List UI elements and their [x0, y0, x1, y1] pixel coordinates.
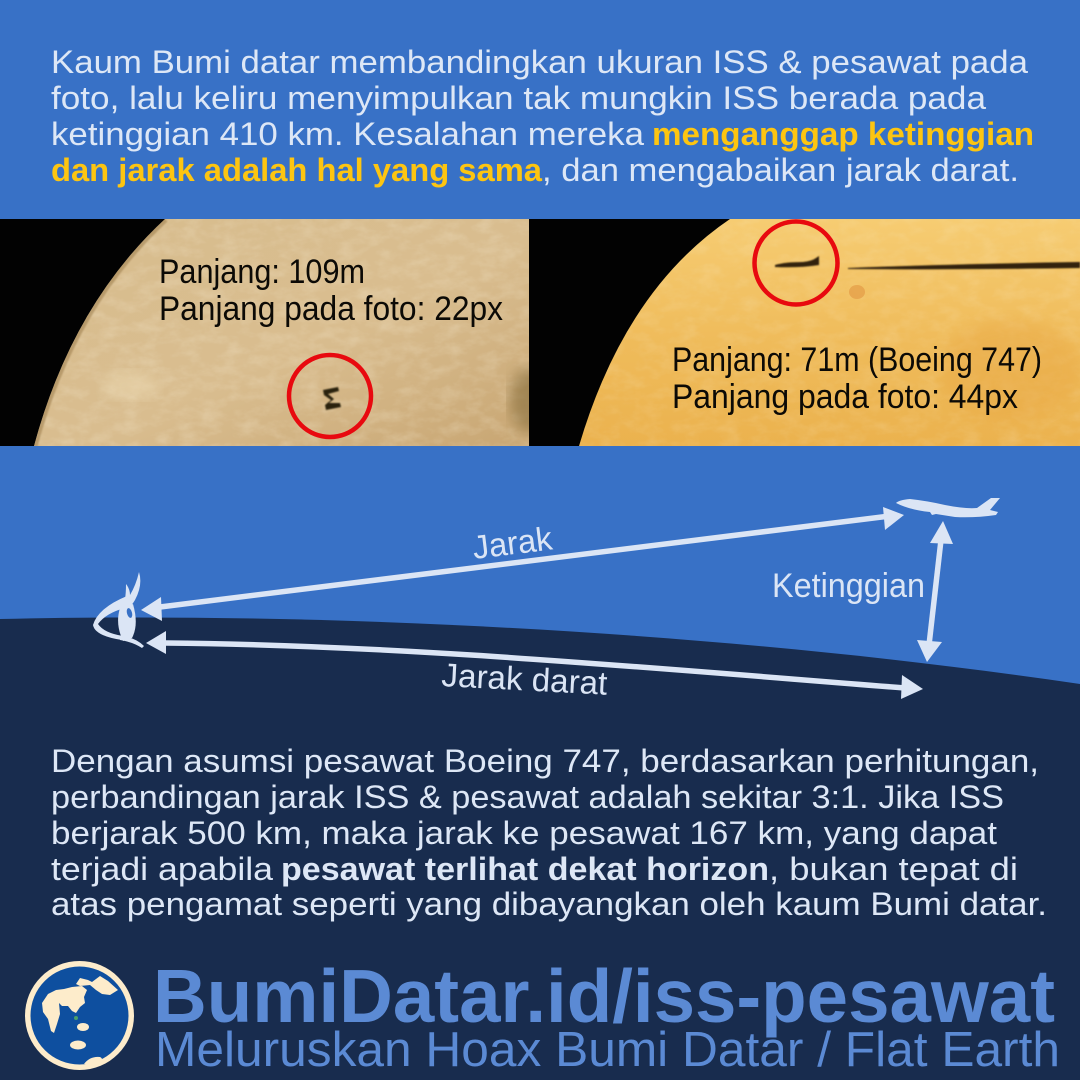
intro text block: ketinggian 410 km. Kesalahan mereka	[51, 116, 645, 152]
airplane silhouette and contrail	[775, 256, 1080, 269]
iss silhouette	[323, 387, 341, 410]
label: ketinggian: Ketinggian	[772, 567, 925, 605]
arrow: ketinggian	[917, 521, 953, 662]
intro text block: dan jarak adalah hal yang sama	[51, 152, 543, 188]
red circle: iss	[289, 355, 371, 437]
explanation text block	[51, 743, 1047, 922]
explanation text block: Dengan asumsi pesawat Boeing 747, berdasarkan perhitungan,	[51, 743, 1039, 779]
explanation text block: , bukan tepat di	[769, 851, 1018, 887]
iss label: Panjang: 109m	[159, 253, 365, 291]
site url: BumiDatar.id/iss-pesawat	[153, 954, 1055, 1038]
label: jarak: Jarak	[470, 519, 555, 566]
explanation text block: pesawat terlihat dekat horizon	[281, 851, 769, 887]
red circle: airplane	[754, 222, 838, 304]
airplane label: Panjang pada foto: 44px	[672, 378, 1018, 416]
explanation text block: atas pengamat seperti yang dibayangkan oleh kaum Bumi datar.	[51, 886, 1047, 922]
label: jarak darat: Jarak darat	[441, 656, 608, 702]
logo: globe	[25, 961, 134, 1070]
arrow: jarak	[141, 507, 904, 621]
photo: airplane crossing the moon	[529, 219, 1080, 446]
iss label: Panjang pada foto: 22px	[159, 290, 503, 328]
iss label	[159, 253, 503, 328]
arrow: jarak darat	[146, 631, 923, 699]
intro text block: menganggap ketinggian	[652, 116, 1034, 152]
intro text block: foto, lalu keliru menyimpulkan tak mungkin ISS berada pada	[51, 80, 987, 116]
airplane label	[672, 341, 1042, 416]
intro text block: , dan mengabaikan jarak darat.	[542, 152, 1019, 188]
diagram: distance and altitude	[93, 498, 1000, 702]
explanation text block: berjarak 500 km, maka jarak ke pesawat 167 km, yang dapat	[51, 815, 997, 851]
ground: dark curved earth	[0, 617, 1080, 1080]
tagline: Meluruskan Hoax Bumi Datar / Flat Earth	[155, 1023, 1060, 1077]
icon: eye	[93, 572, 144, 648]
intro text block: Kaum Bumi datar membandingkan ukuran ISS & pesawat pada	[51, 44, 1029, 80]
icon: airplane	[896, 498, 1000, 517]
explanation text block: perbandingan jarak ISS & pesawat adalah sekitar 3:1. Jika ISS	[51, 779, 1004, 815]
photo: ISS crossing the moon	[0, 219, 550, 446]
airplane label: Panjang: 71m (Boeing 747)	[672, 341, 1042, 379]
intro text block	[51, 44, 1034, 188]
explanation text block: terjadi apabila	[51, 851, 274, 887]
